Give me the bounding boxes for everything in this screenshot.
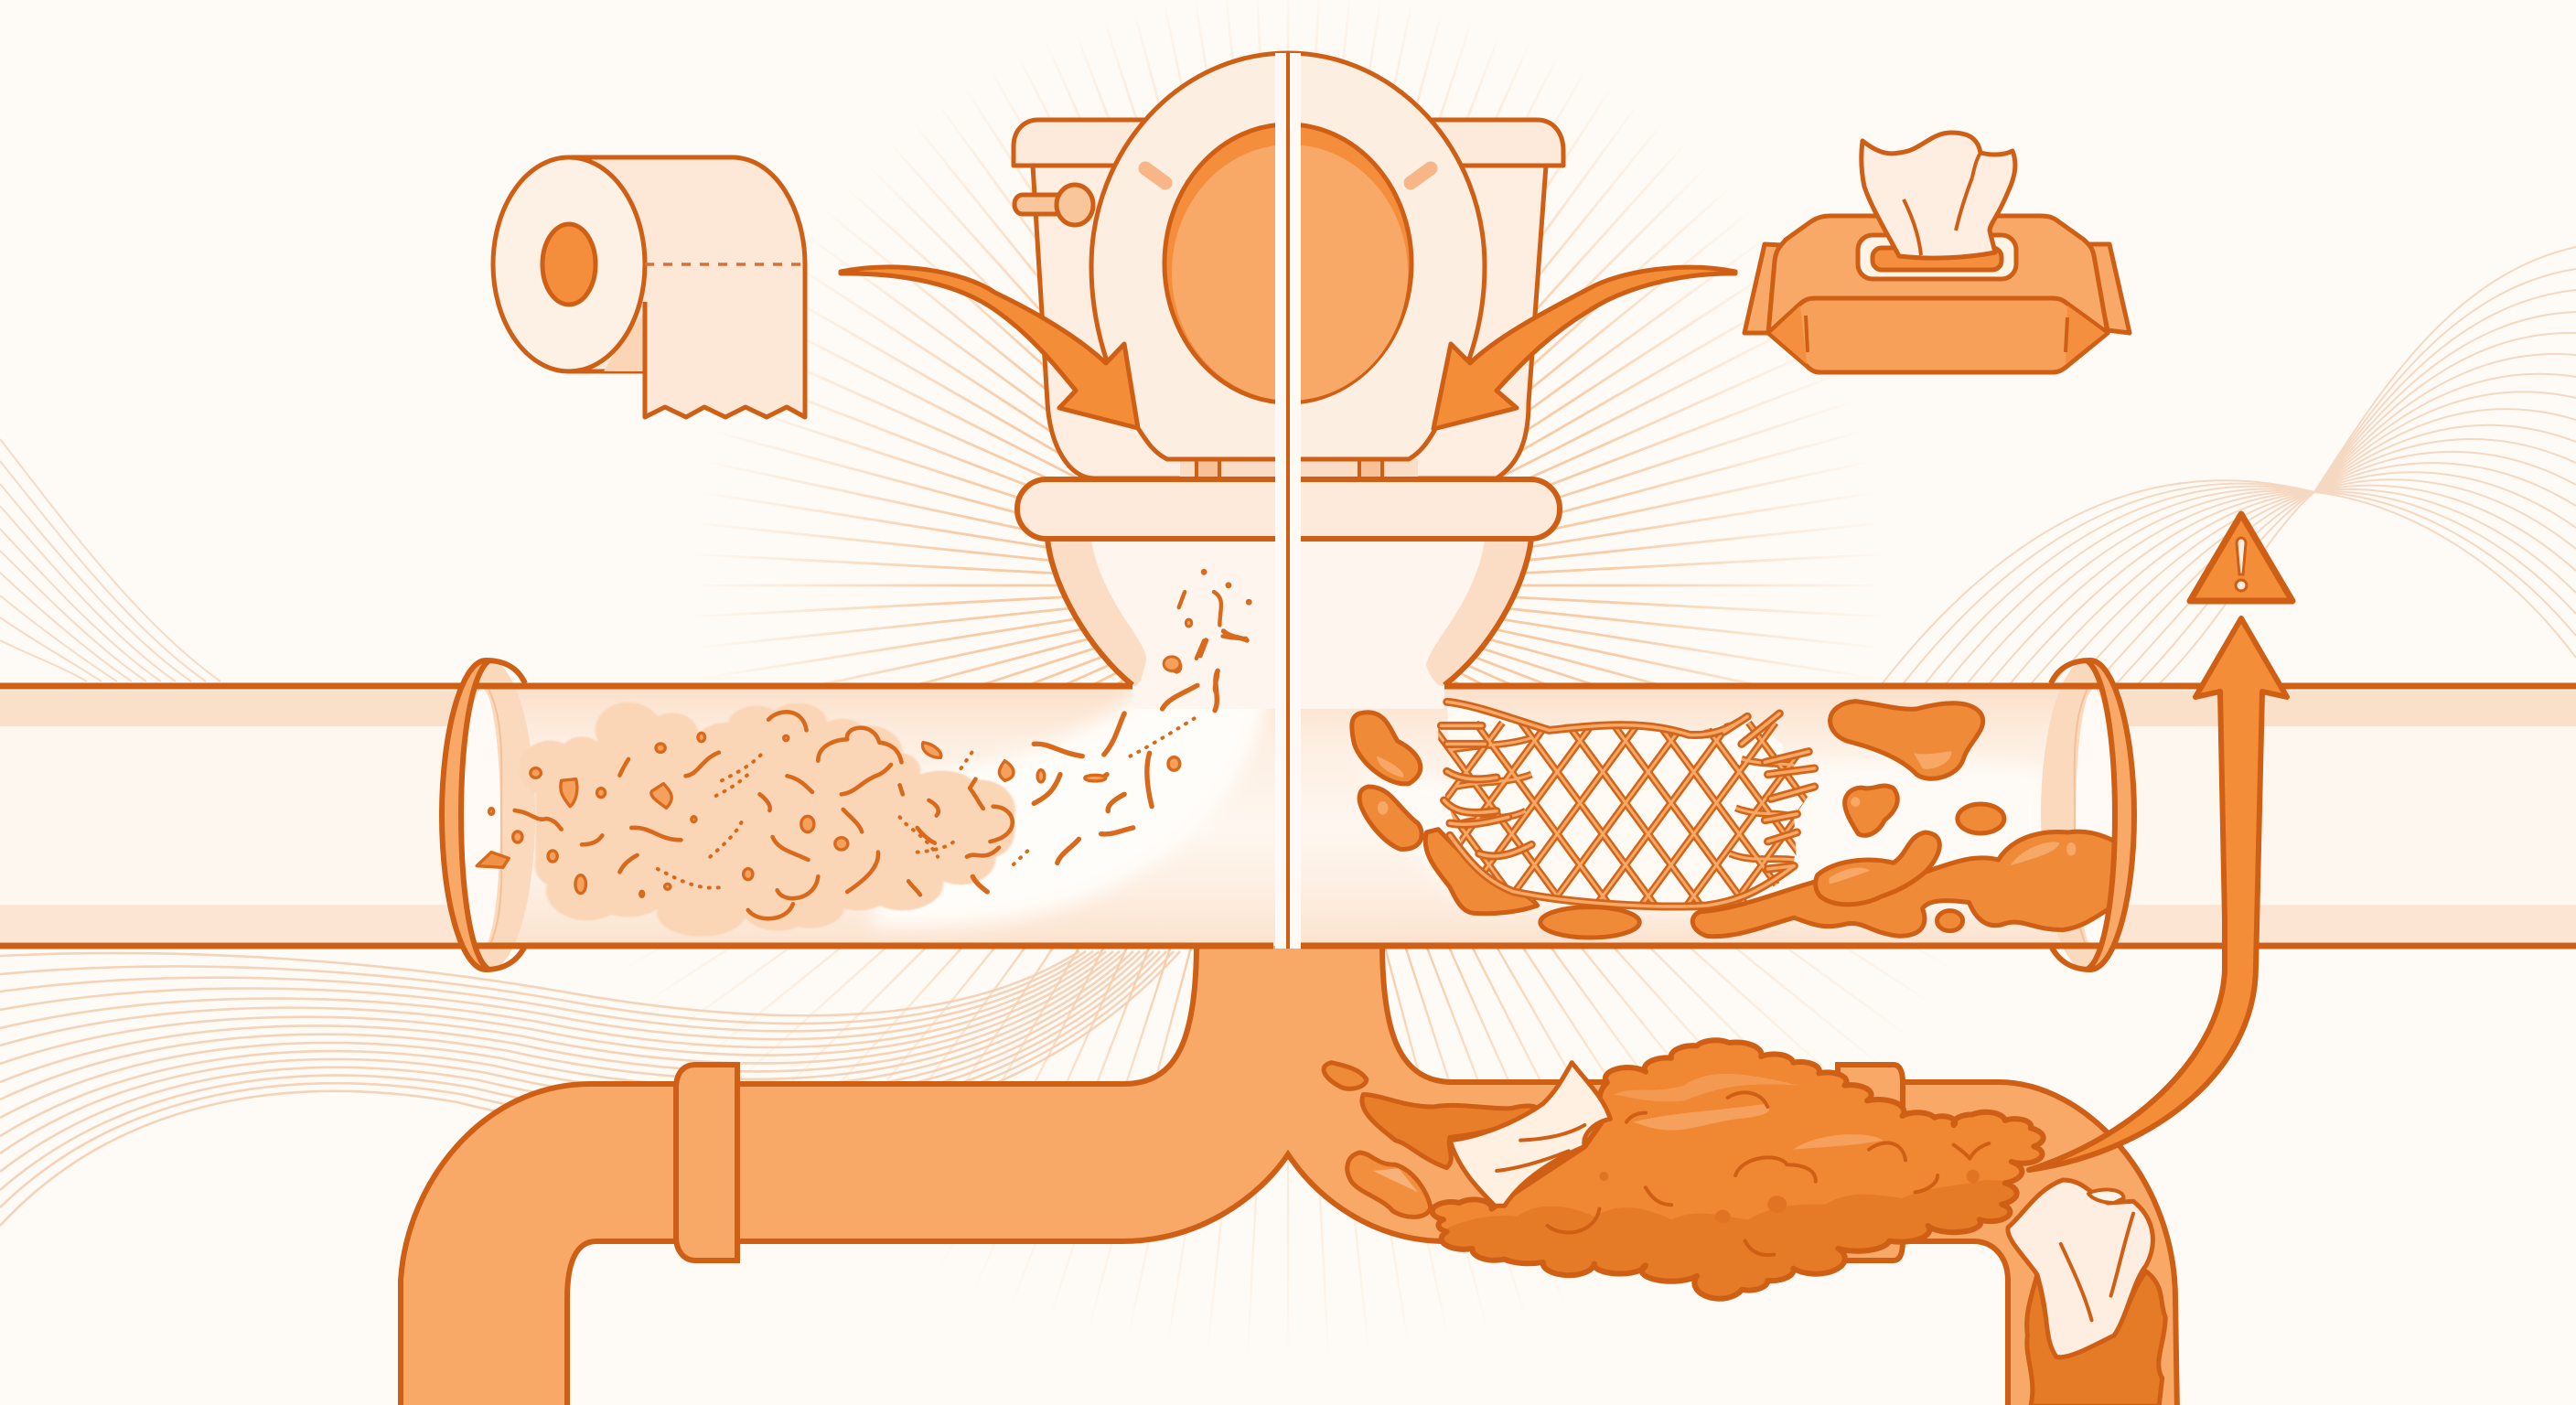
left pipe flange — [676, 1065, 737, 1260]
wipe stuck in fatberg — [1450, 1063, 1610, 1206]
lower pipe clog — [1324, 1040, 2165, 1405]
icon: warning triangle — [2190, 514, 2292, 601]
left flow swoosh — [869, 549, 1273, 927]
tank — [1033, 166, 1546, 478]
left pipe debris: toilet paper dissolving — [477, 631, 1247, 937]
paper cloud — [520, 702, 1015, 937]
clump behind net — [1425, 830, 1538, 914]
paper specks — [658, 716, 1197, 888]
grease clumps — [1352, 702, 2115, 938]
toilet rim — [1017, 479, 1560, 539]
moire lines: right side — [1882, 247, 2576, 684]
tank lid — [1014, 120, 1563, 166]
hinges — [1197, 459, 1382, 481]
grease smear — [1362, 1095, 1537, 1168]
paper fibres — [515, 631, 1247, 918]
left tab — [1744, 244, 1782, 333]
right pipe: wipes net and clumps — [1293, 700, 2115, 938]
bowl neck — [1047, 539, 1531, 709]
icon: toilet paper roll — [493, 157, 805, 417]
moire lines: upper left — [0, 439, 220, 681]
arrow: paper into toilet — [841, 267, 1138, 428]
exclamation mark — [2236, 538, 2247, 591]
wipe in elbow — [2008, 1180, 2152, 1357]
icon: wet wipes pack — [1744, 133, 2130, 372]
grease blob — [1347, 1153, 1431, 1217]
debris falling through bowl neck — [1164, 570, 1250, 694]
right pipe flange — [1838, 1065, 1903, 1260]
horizontal transparent pipe — [0, 549, 2576, 971]
paper crumbs — [477, 657, 1181, 896]
hinge gap — [1180, 459, 1418, 479]
right ring rim — [2051, 660, 2134, 970]
radiating rays behind toilet — [458, 0, 2118, 1405]
left ring rim — [442, 660, 525, 970]
wipe net — [1436, 697, 1819, 911]
fatberg mass — [1427, 1040, 2044, 1302]
toilet — [1014, 53, 1563, 709]
left ring back wall — [442, 660, 535, 971]
small grease spot — [1324, 1063, 1367, 1089]
pack top — [1768, 216, 2108, 372]
seat pads — [1145, 168, 1431, 183]
elbow clog mass — [2027, 1271, 2165, 1405]
dispenser opening — [1858, 235, 2016, 279]
right ring back wall — [2041, 660, 2134, 971]
toilet seat lid — [1091, 53, 1485, 459]
clump highlights — [1377, 751, 2076, 885]
right tab — [2088, 244, 2130, 333]
arrow: wipes into toilet — [1433, 267, 1735, 429]
tissue — [1862, 133, 2015, 258]
center divider — [1275, 53, 1301, 949]
seat opening — [1165, 124, 1411, 402]
warning arrow rising from clog — [2029, 618, 2287, 1170]
lower drain pipe — [401, 942, 2177, 1405]
moire lines: lower left — [0, 951, 1180, 1226]
right flow swoosh — [1363, 759, 2049, 915]
pack front — [1768, 298, 2108, 372]
flush lever — [1014, 185, 1093, 225]
